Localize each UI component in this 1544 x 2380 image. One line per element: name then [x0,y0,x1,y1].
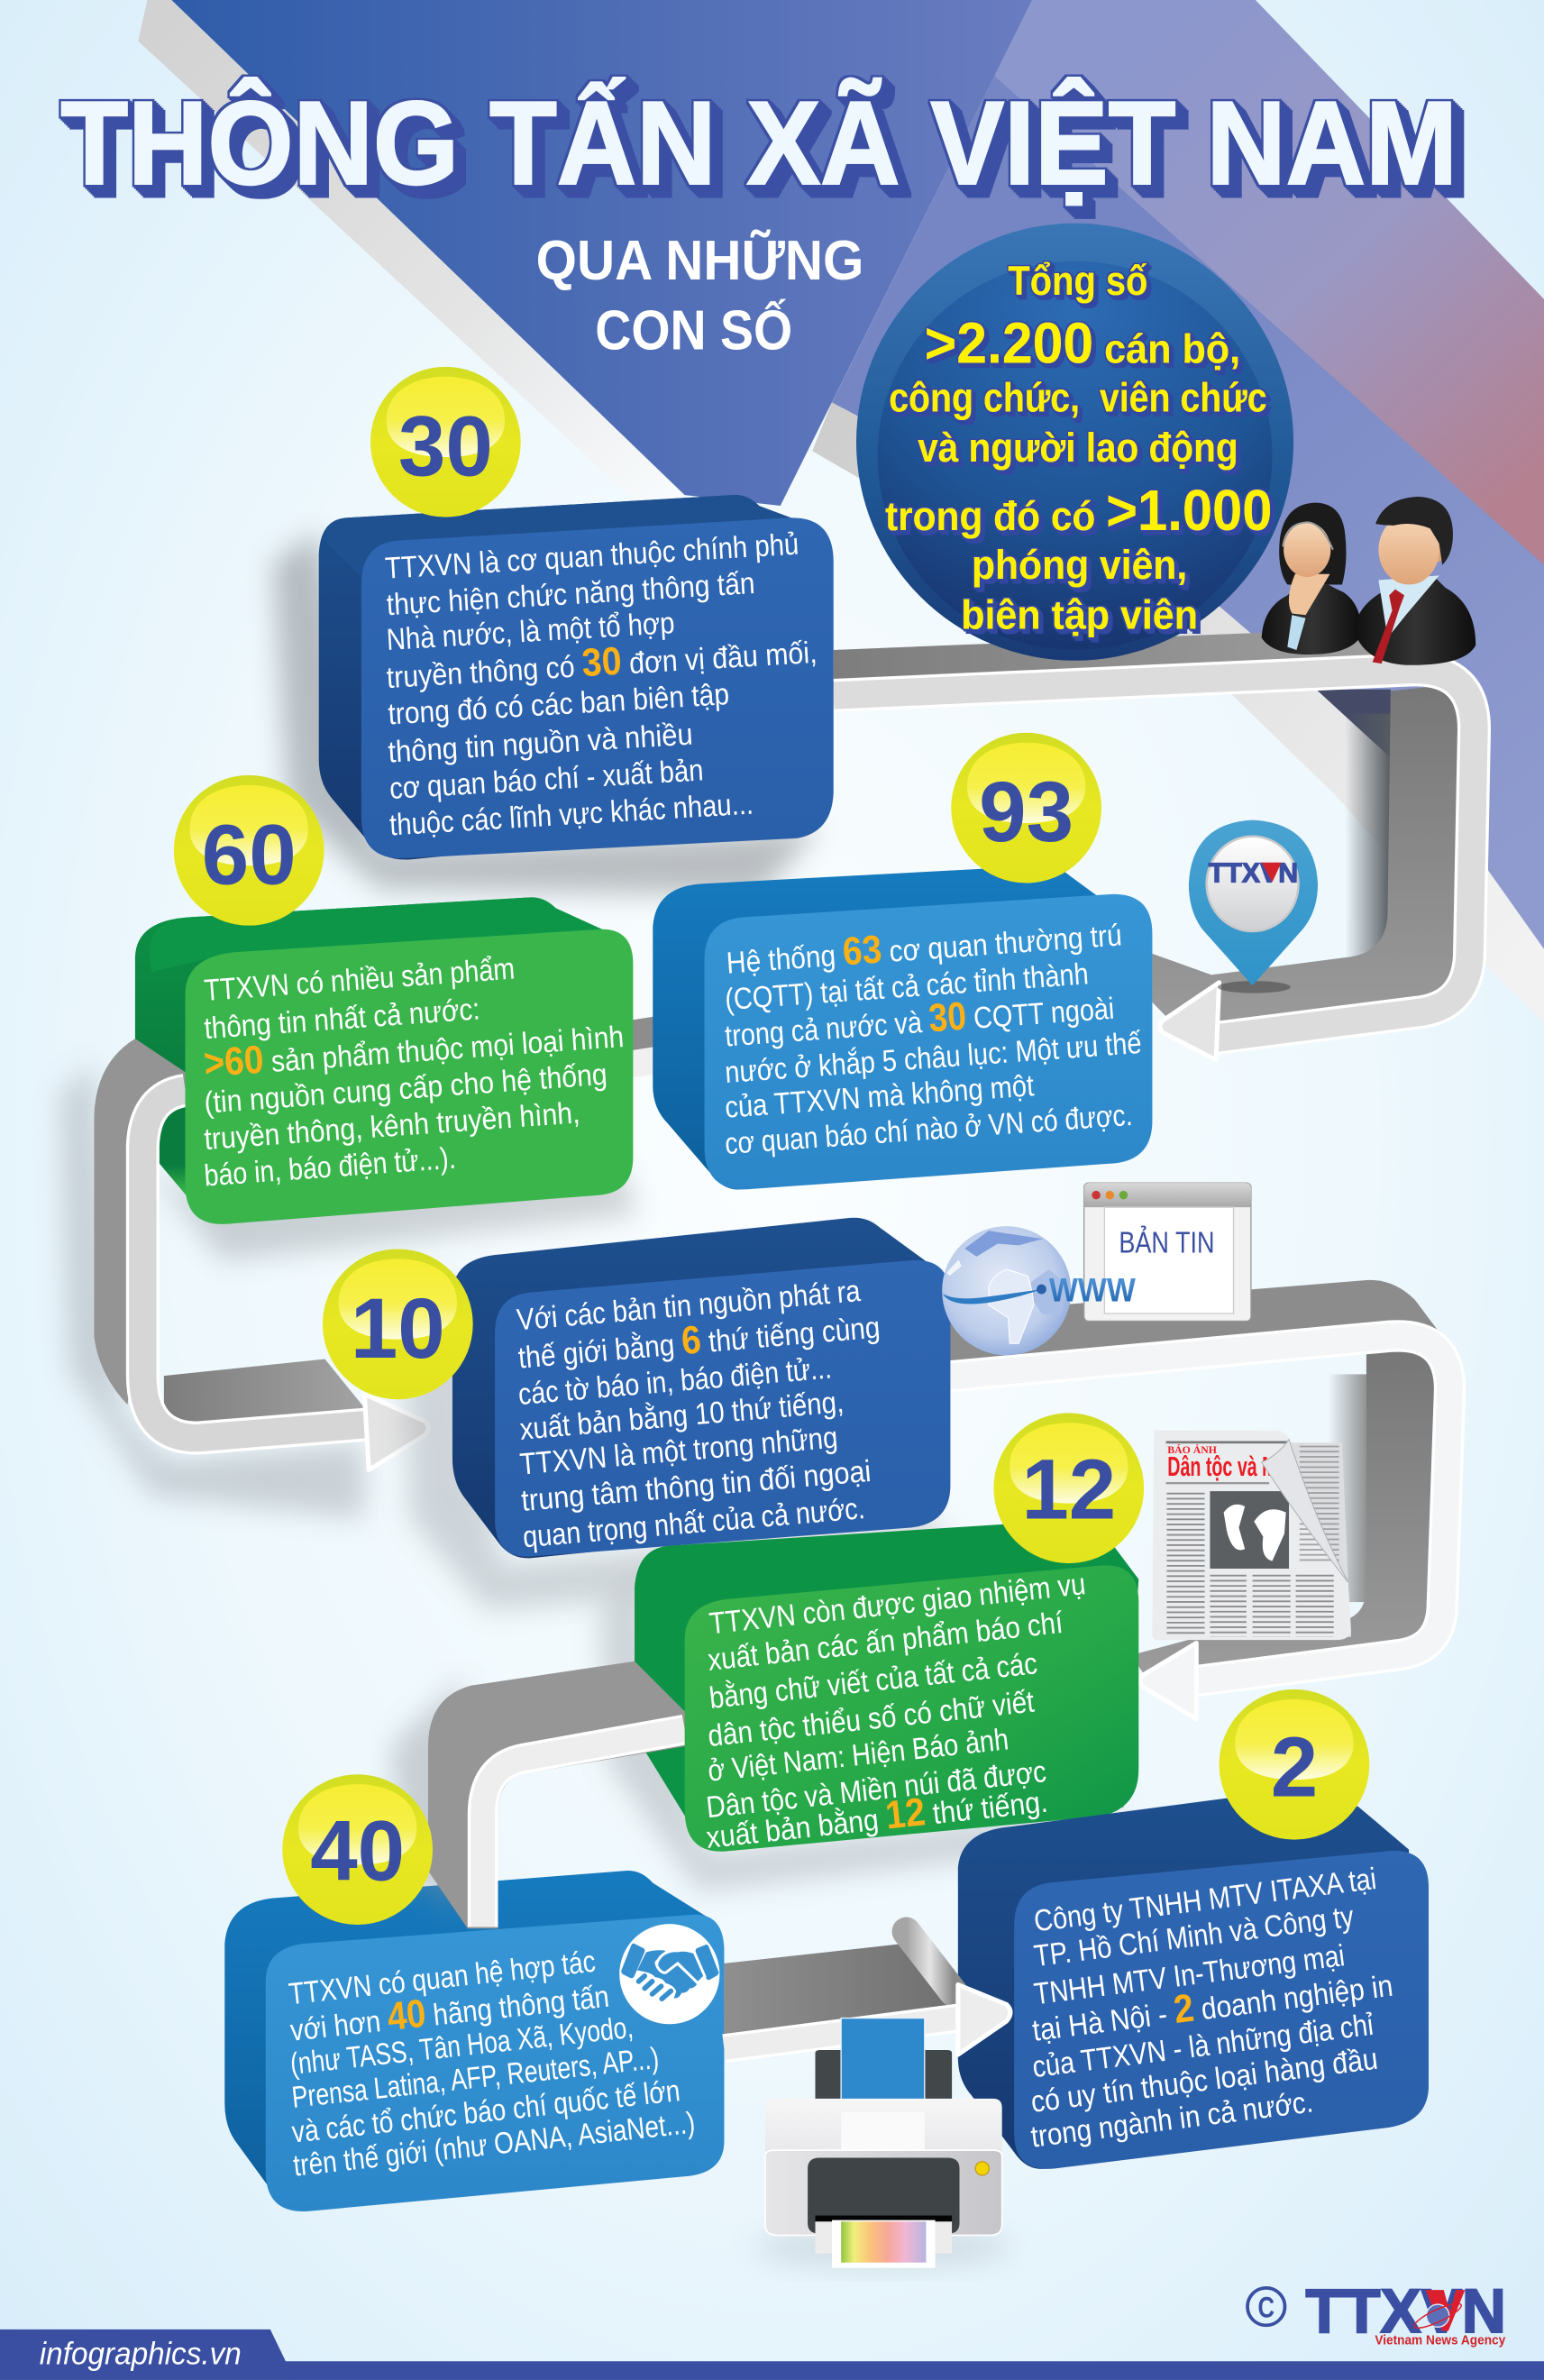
badge: 93: 93 [979,764,1073,859]
text: box 93: trong cả nước và 30 CQTT ngoài [723,984,1116,1056]
panel shadow: box 10 [402,1276,941,1609]
panel back: box 60 [135,897,623,1224]
text: box 60: (tin nguồn cung cấp cho hệ thống [203,1058,608,1121]
text: box 93: cơ quan báo chí nào ở VN có được. [724,1099,1134,1161]
circle text: trong đó có >1.000 [885,478,1272,543]
icon: globe with www [942,1226,1136,1355]
icon: browser window: BẢN TIN [1119,1226,1214,1260]
icon: handshake [619,1924,719,2024]
text: box 60: TTXVN có nhiều sản phẩm [203,952,516,1008]
text: box 40: và các tổ chức báo chí quốc tế lớn [290,2074,681,2150]
panel shadow: box 60 [151,1169,637,1260]
badge: 12 [993,1413,1144,1563]
text: box 10: Với các bản tin nguồn phát ra [516,1275,862,1338]
text: box 2: có uy tín thuộc loại hàng đầu [1029,2043,1380,2119]
title: THÔNG TẤN XÃ VIỆT NAM [60,77,1457,209]
text: box 60: truyền thông, kênh truyền hình, [203,1096,581,1157]
text: box 10: quan trọng nhất của cả nước. [522,1492,866,1554]
badge: 10 [323,1249,473,1399]
text: box 93: Hệ thống 63 cơ quan thường trú [725,910,1123,983]
text: box 12: xuất bản bằng 12 thứ tiếng. [704,1777,1049,1857]
icon: printer [754,2018,1012,2268]
text: box 40 [288,1945,697,2183]
text: box 40: trên thế giới (như OANA, AsiaNet...) [292,2107,697,2183]
circle: total staff [856,224,1293,661]
text: box 30 [384,528,818,842]
subtitle: QUA NHỮNG [536,228,863,292]
logo: copyright and TTXVN: C [1257,2291,1274,2323]
subtitle: CON SỐ [595,298,792,362]
icon: browser window [1084,1183,1251,1321]
arrow ribbon: from box 30 to box 93 [834,626,1475,1060]
text: box 10 [516,1275,882,1554]
arrow ribbon: from box 10 to box 12 [934,1280,1450,1719]
text: box 60: báo in, báo điện tử...). [203,1142,457,1194]
icon: location pin: TTXVN [1209,859,1298,889]
badge: 2 [1220,1689,1369,1840]
text: box 10: xuất bản bằng 10 thứ tiếng, [518,1385,845,1447]
badge: 93 [951,733,1101,883]
text: box 12: Dân tộc và Miền núi đã được [705,1755,1048,1825]
logo: copyright and TTXVN: Vietnam News Agency [1375,2334,1506,2348]
text: box 2: Công ty TNHH MTV ITAXA tại [1032,1863,1378,1938]
text: box 40: với hơn 40 hãng thông tấn [288,1972,611,2050]
arrow ribbon: between box 93 and box 60 [628,1014,668,1078]
panel back: box 40 [224,1871,714,2211]
text: box 12 [704,1568,1087,1857]
text: box 2: TP. Hồ Chí Minh và Công ty [1032,1900,1356,1973]
text: box 30: thực hiện chức năng thông tấn [386,567,756,622]
badge: 30 [370,367,521,517]
circle text: phóng viên, [972,542,1187,588]
circle text: biên tập viên [961,591,1198,637]
text: box 2: của TTXVN - là những địa chỉ [1030,2009,1375,2084]
text: box 10: trung tâm thông tin đối ngoại [520,1455,872,1518]
text: box 30: thuộc các lĩnh vực khác nhau... [388,788,754,842]
text: box 60: thông tin nhất cả nước: [203,993,481,1046]
icon: woman [1262,503,1362,654]
text: box 30: TTXVN là cơ quan thuộc chính phủ [384,528,799,586]
top decorative diagonal bands [138,0,1544,1022]
panel shadow: box 30 [273,532,820,896]
circle text: >2.200 cán bộ, [925,311,1240,376]
text: box 30: trong đó có các ban biên tập [387,678,730,731]
text: box 93: (CQTT) tại tất cả các tỉnh thành [724,957,1090,1017]
text: box 2: trong ngành in cả nước. [1029,2085,1315,2155]
icon: newspaper: BÁO ẢNH [1167,1443,1217,1456]
text: box 40: (như TASS, Tân Hoa Xã, Kyodo, [288,2011,635,2082]
icon: newspaper: Dân tộc và M [1167,1452,1277,1482]
icon: globe with www: WWW [1049,1271,1136,1309]
arrow ribbon: from box 40 to box 2 [724,1932,1010,2055]
badge: 10: 10 [351,1281,445,1376]
text: box 12: xuất bản các ấn phẩm báo chí [707,1606,1065,1678]
panel: box 30 [319,495,834,860]
text: box 30: truyền thông có 30 đơn vị đầu mối, [385,627,818,697]
panel shadow: ribbon box 60 to box 10 [60,1063,364,1518]
circle text: công chức, viên chức [889,375,1267,421]
badge: 2: 2 [1271,1720,1318,1815]
text: box 2 [1029,1863,1395,2155]
icon: newspaper [1152,1431,1351,1640]
text: box 2: TNHH MTV In-Thương mại [1032,1939,1347,2011]
panel back: box 12 [635,1518,1138,1850]
text: box 10: thế giới bằng 6 thứ tiếng cùng [516,1302,882,1378]
panel: box 10 [452,1218,950,1558]
text: box 12: ở Việt Nam: Hiện Báo ảnh [707,1723,1010,1789]
text: box 2: tại Hà Nội - 2 doanh nghiệp in [1029,1961,1395,2050]
text: box 93 [723,910,1143,1161]
panel: box 12 [685,1565,1138,1857]
arrow ribbon: from box 12 to box 40 [428,1661,686,1928]
subtitle [536,228,863,362]
text: box 93: của TTXVN mà không một [724,1069,1036,1125]
text: box 93: nước ở khắp 5 châu lục: Một ưu thế [724,1026,1143,1090]
text: box 12: dân tộc thiểu số có chữ viết [707,1686,1037,1753]
icon: man [1354,497,1475,665]
badge: 60: 60 [202,807,297,902]
panel: box 60 [185,929,633,1224]
panel back: box 2 [958,1786,1409,2169]
badge: 12: 12 [1021,1442,1116,1536]
panel: box 93 [653,865,1152,1189]
footer bar [0,2330,1544,2380]
circle text: Tổng số [1008,258,1147,304]
logo: copyright and TTXVN: TTXVN [1306,2275,1506,2346]
text: box 10: TTXVN là một trong những [518,1421,839,1482]
badge: 60 [174,775,324,926]
text: box 30: thông tin nguồn và nhiều [387,719,694,770]
arrow ribbon: from box 60 to box 10 [94,1039,428,1470]
text: box 40: TTXVN có quan hệ hợp tác [288,1945,598,2011]
footer bar: infographics.vn [40,2337,242,2372]
text: box 40: Prensa Latina, AFP, Reuters, AP...) [290,2042,661,2115]
text: box 10: các tờ báo in, báo điện tử... [517,1351,833,1412]
icon: location pin [1189,820,1318,993]
circle text [885,258,1272,637]
panel shadow: box 12 [599,1579,1123,1890]
text: box 60 [203,952,625,1194]
text: box 30: cơ quan báo chí - xuất bản [388,754,704,806]
badge: 40: 40 [310,1803,405,1898]
panel: box 2 [1014,1851,1429,2169]
panel: box 40 [266,1915,724,2211]
circle text: và người lao động [918,425,1238,471]
panel shadow: ribbon box 12 to box 40 [392,1678,463,1913]
badge: 40 [282,1774,433,1925]
text: box 60: >60 sản phẩm thuộc mọi loại hình [203,1012,625,1085]
text: box 12: bằng chữ viết của tất cả các [708,1646,1039,1716]
text: box 30: Nhà nước, là một tổ hợp [386,607,675,657]
badge: 30: 30 [398,398,493,493]
text: box 12: TTXVN còn được giao nhiệm vụ [708,1568,1087,1641]
